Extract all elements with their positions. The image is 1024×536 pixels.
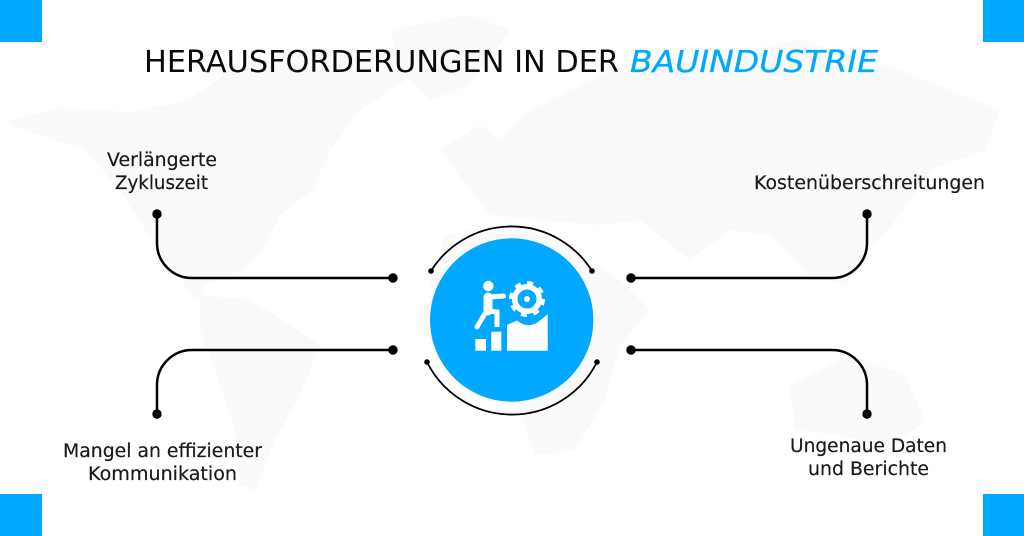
center circle xyxy=(430,238,593,402)
title xyxy=(144,45,879,80)
label: Verlängerte Zykluszeit: Zykluszeit xyxy=(115,173,208,194)
icon: gear xyxy=(511,283,543,315)
title: BAUINDUSTRIE xyxy=(630,45,879,80)
icon: block xyxy=(507,314,548,351)
arc: bottom around circle xyxy=(424,359,600,415)
connector: top right xyxy=(626,209,872,283)
label: Verlängerte Zykluszeit xyxy=(107,150,217,194)
label: Ungenaue Daten und Berichte xyxy=(790,436,947,480)
arc: top around circle xyxy=(428,226,595,274)
label: Mangel an effizienter Kommunikation: Mangel an effizienter xyxy=(63,441,262,462)
label: Mangel an effizienter Kommunikation xyxy=(63,441,262,485)
icon: person xyxy=(477,281,504,327)
connector: bottom right xyxy=(626,345,872,419)
label: Ungenaue Daten und Berichte: und Berichte xyxy=(808,459,929,480)
title: HERAUSFORDERUNGEN IN DER xyxy=(144,45,619,80)
connector: bottom left xyxy=(152,345,398,419)
label: Mangel an effizienter Kommunikation: Kommunikation xyxy=(88,464,237,485)
label: Verlängerte Zykluszeit: Verlängerte xyxy=(107,150,217,171)
connector: top left xyxy=(152,209,398,283)
label: Kostenüberschreitungen: Kostenüberschreitungen xyxy=(754,173,985,194)
label: Ungenaue Daten und Berichte: Ungenaue Daten xyxy=(790,436,947,457)
icon: person climbing steps with gear xyxy=(475,281,548,351)
icon: steps xyxy=(475,332,501,351)
